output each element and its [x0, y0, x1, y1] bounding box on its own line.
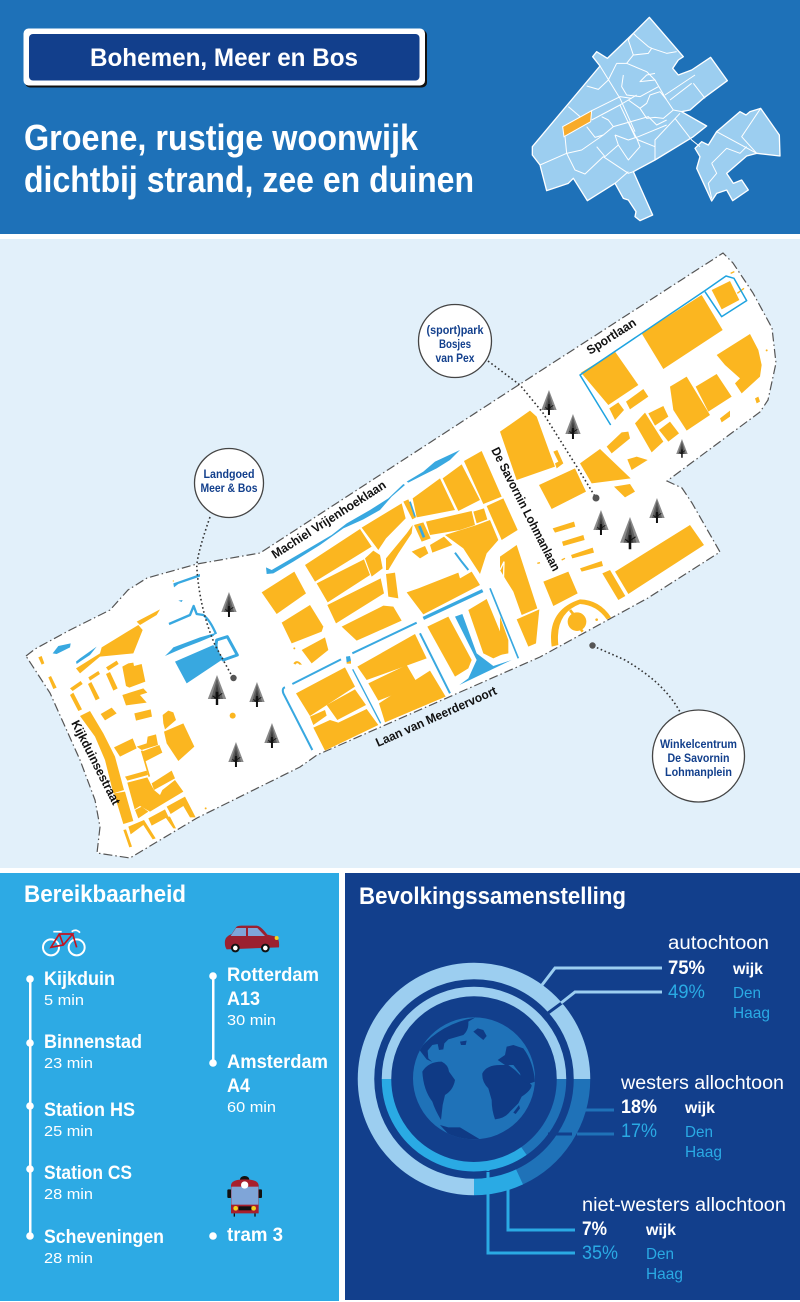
cycling route: Kijkduin [44, 969, 115, 990]
icon: bicycle [43, 930, 85, 955]
locator map of Den Haag [532, 17, 780, 221]
legend: autochtoon: 75% [668, 958, 705, 979]
car routes: 60 min [227, 1099, 276, 1116]
panel: header [0, 0, 800, 234]
callout: Winkelcentrum: Winkelcentrum [660, 739, 737, 751]
tram line: tram 3 [227, 1225, 283, 1246]
callout: Landgoed Meer & Bos: Landgoed [204, 469, 254, 481]
legend: niet-westers allochtoon: Haag [646, 1266, 683, 1283]
connector lines [488, 968, 662, 1253]
street labels: Laan van Meerdervoort [374, 683, 500, 750]
cycling route [26, 969, 164, 1267]
icon: car [225, 926, 279, 952]
street labels: De Savornin Lohmanlaan [488, 445, 563, 573]
title badge: Bohemen, Meer en Bos [90, 44, 358, 72]
panel: Bevolkingssamenstelling [345, 873, 800, 1300]
legend: westers allochtoon: 17% [621, 1121, 657, 1142]
car routes [209, 965, 328, 1116]
callout: sportpark Bosjes van Pex: van Pex [436, 353, 475, 365]
legend: autochtoon: Haag [733, 1005, 770, 1022]
legend: niet-westers allochtoon: niet-westers allochtoon [582, 1195, 786, 1216]
legend: westers allochtoon: 18% [621, 1097, 657, 1118]
cycling route: 25 min [44, 1123, 93, 1140]
cycling route: Station HS [44, 1100, 135, 1121]
cycling route: 28 min [44, 1186, 93, 1203]
callout: sportpark Bosjes van Pex: Bosjes [439, 339, 471, 351]
heading: Bereikbaarheid: Bereikbaarheid [24, 881, 186, 908]
buildings and water: centre [262, 450, 518, 751]
callout: Landgoed Meer & Bos: Meer & Bos [200, 483, 258, 495]
icon: tram [227, 1176, 262, 1217]
legend: westers allochtoon [620, 1073, 784, 1161]
legend: autochtoon [668, 933, 770, 1022]
heading: dichtbij strand, zee en duinen [24, 159, 474, 200]
car routes: Rotterdam [227, 965, 319, 986]
callout: sportpark Bosjes van Pex [418, 304, 600, 502]
globe [413, 1017, 535, 1139]
buildings: roundabout area [500, 545, 625, 655]
cycling route: 5 min [44, 992, 84, 1009]
title badge [24, 28, 427, 88]
car routes: Amsterdam [227, 1052, 328, 1073]
legend: autochtoon: wijk [732, 961, 763, 978]
trees [208, 390, 688, 767]
legend: autochtoon: autochtoon [668, 933, 769, 954]
legend: niet-westers allochtoon: 7% [582, 1219, 607, 1240]
legend: westers allochtoon: westers allochtoon [620, 1073, 784, 1094]
panel: district map [0, 239, 800, 868]
legend: westers allochtoon: Haag [685, 1144, 722, 1161]
legend: niet-westers allochtoon [582, 1195, 786, 1283]
legend: niet-westers allochtoon: Den [646, 1246, 674, 1263]
cycling route: 28 min [44, 1250, 93, 1267]
legend: autochtoon: 49% [668, 982, 705, 1003]
legend: autochtoon: Den [733, 985, 761, 1002]
callout: Winkelcentrum: Lohmanplein [665, 767, 732, 779]
heading [24, 117, 474, 200]
street labels [68, 315, 639, 808]
car routes: A4 [227, 1076, 250, 1097]
heading: Bevolkingssamenstelling: Bevolkingssamenstelling [359, 883, 626, 910]
callout: Landgoed Meer & Bos [194, 448, 264, 681]
legend: westers allochtoon: wijk [684, 1100, 715, 1117]
legend: westers allochtoon: Den [685, 1124, 713, 1141]
highlighted district [563, 111, 592, 137]
cycling route: 23 min [44, 1055, 93, 1072]
panel: Bereikbaarheid [0, 873, 339, 1301]
car routes: A13 [227, 989, 260, 1010]
street labels: Kijkduinsestraat [68, 718, 123, 808]
callout: Winkelcentrum: De Savornin [668, 753, 730, 765]
legend: niet-westers allochtoon: wijk [645, 1222, 676, 1239]
cycling route: Scheveningen [44, 1227, 164, 1248]
district outline [26, 253, 776, 858]
inner ring: Den Haag [386, 992, 562, 1167]
callout: Winkelcentrum [589, 642, 744, 802]
buildings and water: east [500, 272, 768, 594]
street labels: Sportlaan [584, 315, 639, 358]
outer ring: wijk [366, 971, 582, 1187]
buildings and water: west [38, 574, 237, 847]
heading: Groene, rustige woonwijk [24, 117, 419, 158]
donut chart: wijk and Den Haag [366, 971, 582, 1187]
cycling route: Binnenstad [44, 1032, 142, 1053]
callout: sportpark Bosjes van Pex: (sport)park [426, 325, 484, 337]
cycling route: Station CS [44, 1163, 132, 1184]
car routes: 30 min [227, 1012, 276, 1029]
legend: niet-westers allochtoon: 35% [582, 1243, 618, 1264]
street labels: Machiel Vrijenhoeklaan [269, 478, 389, 562]
